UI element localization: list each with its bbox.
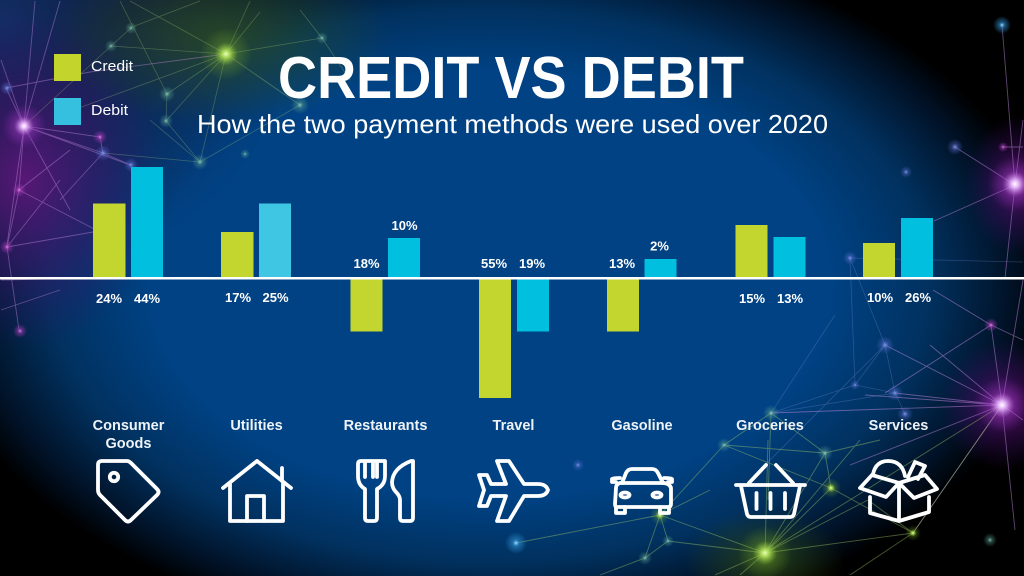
subtitle: How the two payment methods were used over 2020 [197, 109, 828, 139]
group: restaurants bars: 10% [391, 218, 418, 233]
category: gasoline [611, 418, 673, 513]
group: groceries bars: 13% [777, 291, 803, 306]
group: restaurants bars [350, 218, 420, 332]
axis line [0, 277, 1024, 280]
category: groceries [736, 418, 805, 517]
icon: airplane [479, 461, 548, 521]
group: travel bars: 19% [519, 256, 545, 271]
group: travel bars: 55% [481, 256, 507, 271]
group: utilities bars [221, 204, 291, 305]
bar chart [0, 167, 1024, 398]
group: gasoline bars [607, 238, 676, 332]
category: services: Services [869, 418, 928, 434]
group: utilities bars: 25% [262, 290, 289, 305]
legend: debit: Debit [91, 102, 129, 119]
group: consumer goods bars: 44% [134, 291, 160, 306]
legend [54, 54, 134, 125]
category: consumer goods: Consumer [93, 418, 165, 434]
group: gasoline bars: 13% [609, 256, 635, 271]
title: CREDIT VS DEBIT [278, 45, 744, 111]
category: travel: Travel [493, 418, 534, 434]
category: restaurants: Restaurants [344, 418, 427, 434]
group: gasoline bars: 2% [650, 238, 669, 254]
group: groceries bars: 15% [739, 291, 765, 306]
group: groceries bars [736, 225, 806, 306]
group: consumer goods bars: 24% [96, 291, 122, 306]
category: consumer goods: Goods [106, 436, 151, 452]
category: restaurants [344, 418, 427, 521]
category: travel [479, 418, 548, 521]
group: restaurants bars: 18% [353, 256, 380, 271]
category: groceries: Groceries [736, 418, 804, 434]
icon: car [612, 469, 672, 513]
group: services bars: 10% [867, 290, 893, 305]
icon: fork and knife [358, 461, 413, 521]
group: consumer goods bars [93, 167, 163, 306]
group: travel bars [479, 256, 549, 398]
icon: house [223, 461, 291, 521]
category: consumer goods [93, 418, 165, 522]
icon: open box [860, 461, 937, 521]
icon: shopping basket [736, 465, 805, 517]
group: services bars: 26% [905, 290, 931, 305]
group: services bars [863, 218, 933, 305]
category: services [860, 418, 937, 521]
category: utilities: Utilities [230, 418, 283, 434]
legend: credit: Credit [91, 58, 134, 75]
icon: price tag [98, 461, 158, 522]
category: utilities [223, 418, 291, 521]
category: gasoline: Gasoline [611, 418, 673, 434]
group: utilities bars: 17% [225, 290, 251, 305]
